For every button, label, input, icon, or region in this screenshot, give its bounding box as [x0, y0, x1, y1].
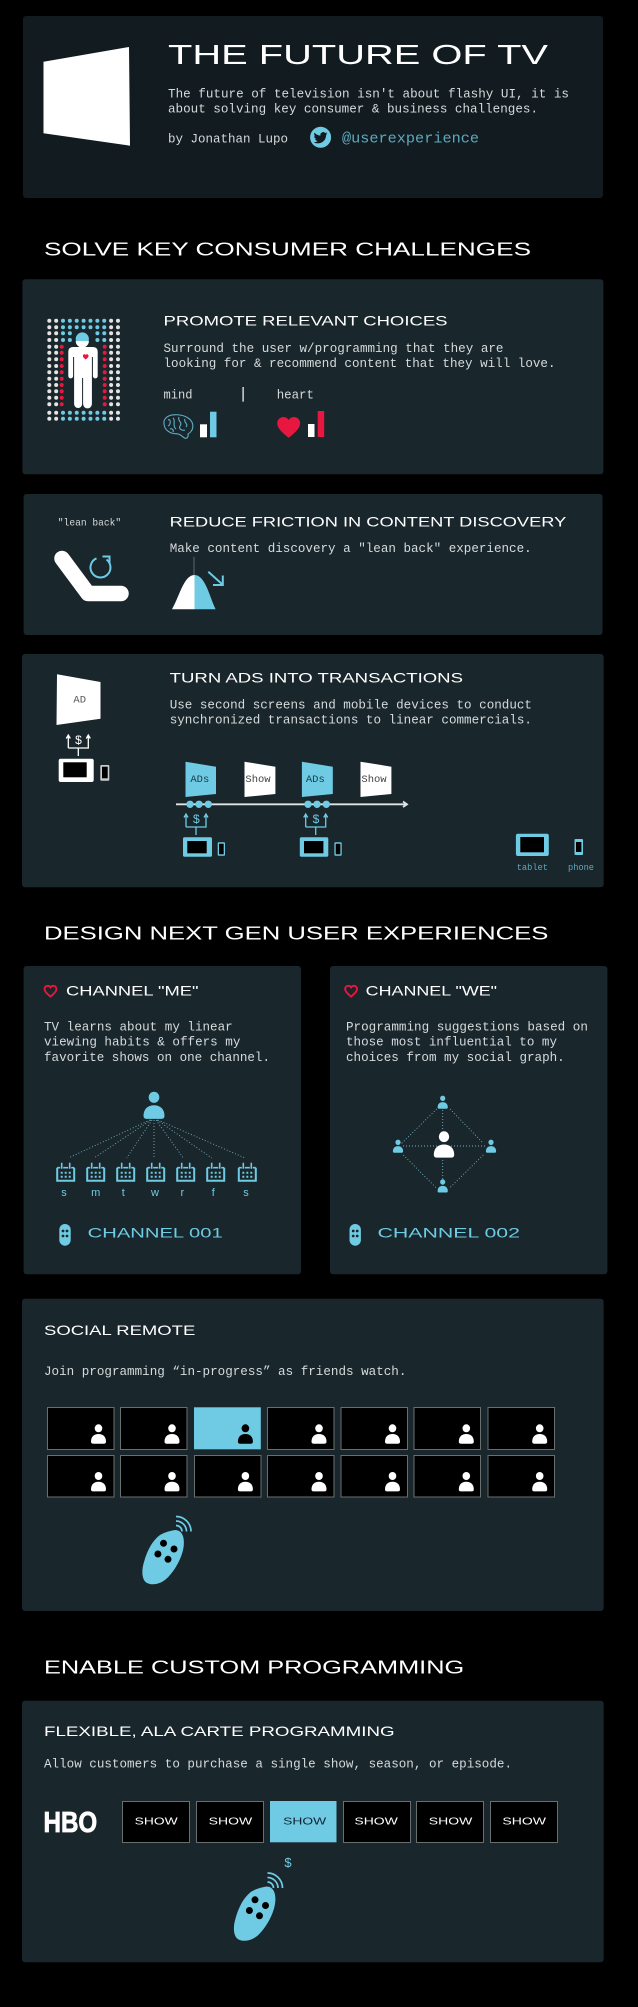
- show boxes: [122, 1801, 558, 1842]
- panel background: [24, 494, 603, 635]
- icon: heart outline: [345, 986, 357, 997]
- icon: tv screen: [44, 47, 130, 146]
- dotted connectors: [68, 1120, 245, 1158]
- timeline cards: ADs: [190, 774, 209, 786]
- description: Programming suggestions based on: [346, 1020, 588, 1034]
- icon: bell curve with arrow: [172, 557, 223, 609]
- panel: turn ads into transactions: [22, 654, 604, 887]
- icon: ad screen: AD: [73, 695, 86, 707]
- header background: [23, 16, 603, 198]
- description: those most influential to my: [346, 1036, 557, 1050]
- description: TV learns about my linear: [44, 1020, 233, 1034]
- icon: white transaction bracket: [66, 733, 90, 756]
- timeline cards: [186, 762, 391, 797]
- icon: cyan transaction bracket 1: [184, 812, 208, 835]
- legend: phone: [568, 839, 594, 873]
- icon: heart: [277, 417, 300, 438]
- panel heading: PROMOTE RELEVANT CHOICES: [164, 313, 448, 329]
- panel background: [22, 1299, 604, 1611]
- description: Surround the user w/programming that they are: [164, 342, 504, 356]
- panel background: [22, 1701, 604, 1962]
- description: [44, 1020, 270, 1065]
- bars: heart: [308, 411, 324, 437]
- icon: left friend: [393, 1140, 403, 1153]
- heading: solve key consumer challenges: SOLVE KEY CONSUMER CHALLENGES: [44, 240, 531, 260]
- intro text: [168, 87, 569, 117]
- weekday labels: s: [243, 1187, 249, 1199]
- panel background: [22, 654, 604, 887]
- panel: channel me: [24, 966, 301, 1274]
- description: favorite shows on one channel.: [44, 1051, 270, 1065]
- description: [164, 342, 556, 371]
- icon: white transaction bracket: $: [75, 733, 82, 747]
- panel: social remote: [22, 1299, 604, 1611]
- panel background: [24, 966, 301, 1274]
- legend: tablet: tablet: [517, 863, 548, 873]
- description: [346, 1020, 588, 1065]
- panel heading: REDUCE FRICTION IN CONTENT DISCOVERY: [170, 514, 567, 530]
- logo: HBO: HBO: [44, 1807, 97, 1839]
- panel heading: FLEXIBLE, ALA CARTE PROGRAMMING: [44, 1723, 395, 1739]
- weekday labels: w: [150, 1187, 159, 1199]
- show boxes: SHOW: [502, 1816, 546, 1828]
- heart label: heart: [277, 388, 314, 402]
- panel: channel we: [330, 966, 607, 1274]
- weekday labels: s: [61, 1187, 67, 1199]
- panel background: [330, 966, 607, 1274]
- icons: weekly calendars: [57, 1163, 256, 1181]
- show boxes: SHOW: [209, 1816, 252, 1828]
- icon: reclining chair: [62, 558, 121, 594]
- icon: bottom friend: [438, 1179, 448, 1192]
- panel: flexible programming: [22, 1701, 604, 1962]
- show boxes: SHOW: [429, 1816, 472, 1828]
- description: choices from my social graph.: [346, 1051, 565, 1065]
- heading: enable custom programming: ENABLE CUSTOM PROGRAMMING: [44, 1657, 464, 1677]
- weekday labels: f: [212, 1187, 216, 1199]
- title: THE FUTURE OF TV: [168, 39, 548, 70]
- twitter handle: @userexperience: [342, 130, 479, 147]
- icon: cyan transaction bracket 2: $: [313, 812, 320, 826]
- friend screens grid: [48, 1407, 554, 1497]
- icon: center person: [434, 1131, 454, 1158]
- weekday labels: [61, 1187, 249, 1199]
- description: [170, 698, 532, 727]
- intro text: about solving key consumer & business challenges.: [168, 103, 538, 117]
- description: Make content discovery a "lean back" experience.: [170, 542, 532, 556]
- icon: cyan transaction bracket 2: [304, 812, 328, 835]
- channel label: CHANNEL 001: [88, 1225, 223, 1241]
- weekday labels: t: [122, 1187, 125, 1199]
- timeline cards: ADs: [306, 774, 325, 786]
- icon: right friend: [486, 1140, 496, 1153]
- show boxes: SHOW: [354, 1816, 398, 1828]
- dotted network: [402, 1109, 486, 1188]
- description: viewing habits & offers my: [44, 1036, 241, 1050]
- panel heading: CHANNEL "ME": [66, 983, 199, 999]
- timeline cards: Show: [361, 774, 387, 786]
- legend: tablet: [516, 834, 549, 873]
- icon: white tablet and phone: [59, 759, 109, 782]
- show boxes: SHOW: [283, 1816, 326, 1828]
- icon: cyan tablet and phone 1: [183, 837, 225, 857]
- icon: viewer: [144, 1092, 164, 1119]
- panel: reduce friction: [24, 494, 603, 635]
- icon: top friend: [438, 1096, 448, 1109]
- panel background: [22, 279, 603, 474]
- panel heading: SOCIAL REMOTE: [44, 1322, 195, 1338]
- icon: cyan tablet and phone 2: [300, 837, 342, 857]
- intro text: The future of television isn't about flashy UI, it is: [168, 87, 569, 101]
- panel heading: CHANNEL "WE": [366, 983, 497, 999]
- channel label: CHANNEL 002: [378, 1225, 520, 1241]
- show boxes: SHOW: [135, 1816, 178, 1828]
- icon: remote with signal: [234, 1873, 282, 1941]
- icon: person with heart: [68, 332, 98, 408]
- weekday labels: m: [91, 1187, 100, 1199]
- panel: promote relevant choices: [22, 279, 603, 474]
- icon: rotate arrow: [90, 556, 110, 577]
- icon: remote small: [350, 1224, 361, 1246]
- icon: heart outline: [45, 986, 56, 997]
- icon: remote with signal: [142, 1516, 191, 1584]
- heading: design next gen user experiences: DESIGN NEXT GEN USER EXPERIENCES: [44, 923, 548, 943]
- bars: mind: [200, 412, 216, 437]
- timeline arrow: [176, 802, 407, 807]
- description: synchronized transactions to linear commercials.: [170, 713, 532, 727]
- panel: header: [23, 16, 603, 198]
- legend: phone: phone: [568, 863, 594, 873]
- icon: cyan transaction bracket 1: $: [193, 812, 200, 826]
- panel heading: TURN ADS INTO TRANSACTIONS: [170, 670, 463, 686]
- icon: ad screen: [56, 674, 100, 725]
- icon: brain: [164, 415, 193, 438]
- icon: remote small: [59, 1224, 71, 1246]
- lean back label: "lean back": [58, 518, 121, 530]
- weekday labels: r: [180, 1187, 184, 1199]
- timeline cards: Show: [245, 774, 271, 786]
- byline: by Jonathan Lupo: [168, 133, 288, 147]
- dot grid around person: [49, 321, 118, 419]
- dollar sign: $: [284, 1855, 292, 1870]
- description: looking for & recommend content that they will love.: [164, 357, 556, 371]
- icon: twitter: [310, 127, 331, 148]
- mind label: mind: [164, 388, 192, 402]
- description: Allow customers to purchase a single show, season, or episode.: [44, 1758, 512, 1772]
- description: Join programming “in-progress” as friends watch.: [44, 1365, 406, 1379]
- description: Use second screens and mobile devices to conduct: [170, 698, 532, 712]
- timeline dots: [186, 801, 330, 808]
